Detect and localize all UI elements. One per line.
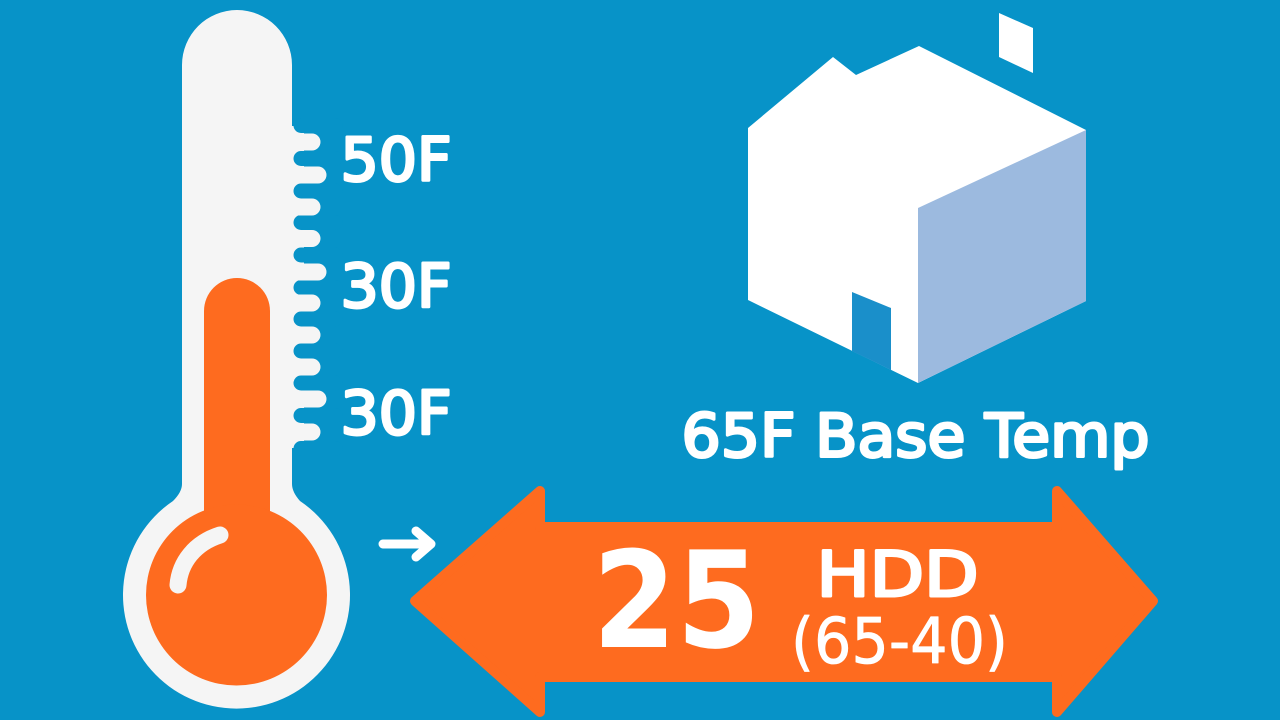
value: 25: 25 — [592, 523, 760, 679]
house white body — [748, 46, 1086, 383]
thermometer mercury — [146, 278, 327, 686]
icon: thermometer — [123, 10, 350, 709]
house shaded side — [918, 130, 1086, 383]
small arrow — [383, 531, 431, 557]
chimney square — [999, 13, 1033, 73]
house door — [852, 292, 891, 370]
temperature label: 30F: 30F — [340, 252, 452, 322]
temperature label: 30F lower: 30F — [340, 379, 452, 449]
icon: isometric house — [748, 13, 1086, 383]
thermometer glass body — [123, 10, 350, 709]
heading: base temperature: 65F Base Temp — [682, 402, 1150, 472]
formula: 65-40: (65-40) — [791, 605, 1008, 678]
bulb highlight — [178, 535, 220, 585]
thermometer scale ticks — [290, 126, 335, 448]
double-headed orange arrow — [415, 491, 1153, 712]
temperature label: 50F: 50F — [340, 126, 452, 196]
label: HDD: HDD — [816, 538, 978, 611]
